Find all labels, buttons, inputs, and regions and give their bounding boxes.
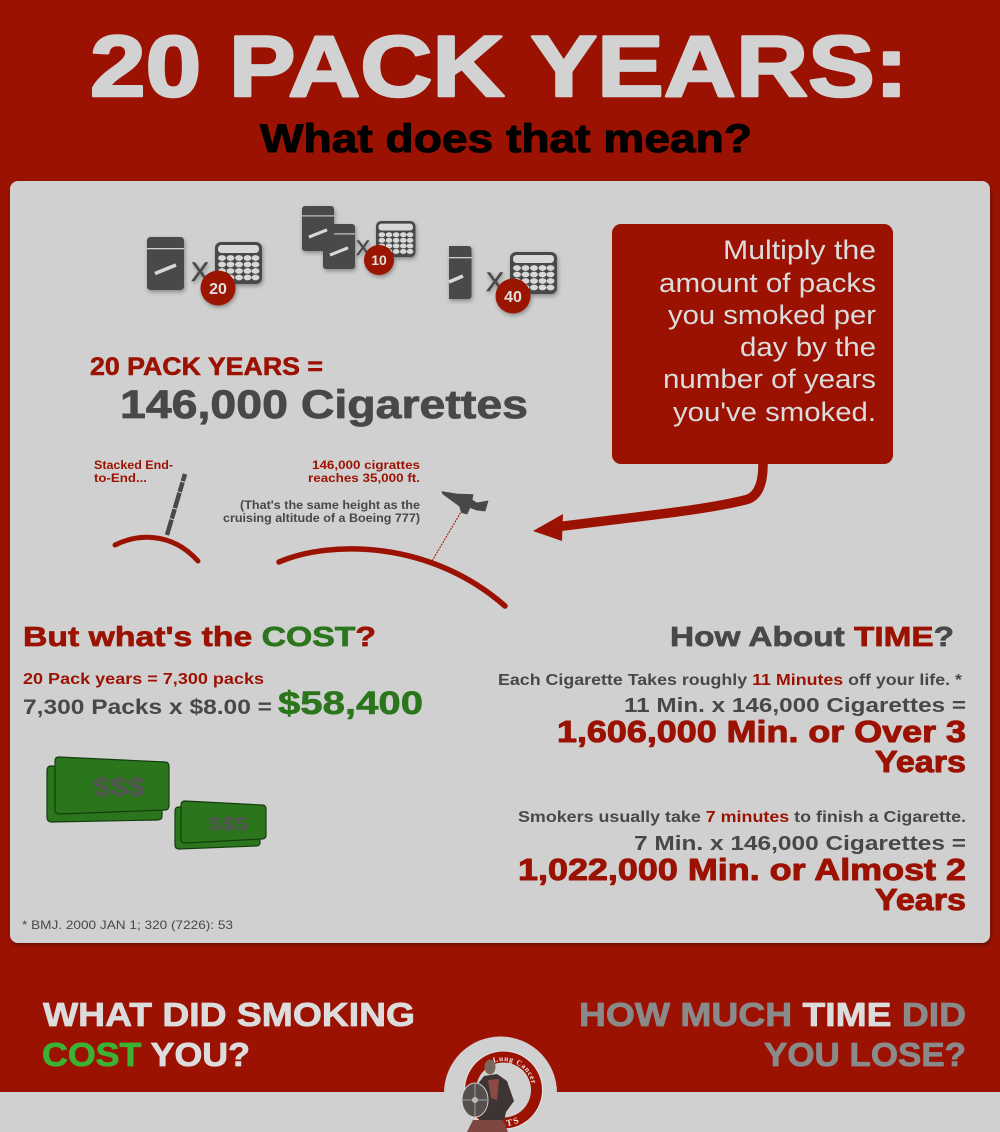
- text: each cigarette takes 11 minutes: Each Cigarette Takes roughly 11 Minutes off your life. *: [498, 672, 963, 689]
- text: Boeing 777 comparison: cruising altitude of a Boeing 777): [223, 513, 420, 525]
- text: smokers take 7 minutes: Smokers usually take 7 minutes to finish a Cigarette.: [518, 809, 966, 826]
- icon: small money: [175, 801, 266, 849]
- logo: Lung Cancer Kilts: [462, 1050, 543, 1132]
- text: cost calculation: 7,300 Packs x $8.00 =: [23, 695, 272, 719]
- icon group: 1 pack x 20 years: X: [191, 257, 209, 287]
- text: cost calculation: [23, 671, 423, 721]
- call to action: cost: WHAT DID SMOKING: [43, 996, 415, 1033]
- text: each cigarette takes 11 minutes: [498, 672, 966, 779]
- icon group: 2 packs x 10 years: [302, 206, 415, 275]
- text: cost calculation: $58,400: [278, 685, 423, 721]
- callout: how to multiply: Multiply the: [723, 235, 876, 265]
- icon: small money: $$$: [209, 814, 248, 834]
- call to action: time: [579, 996, 966, 1073]
- logo: Lung Cancer Kilts: KILTS: [504, 1117, 518, 1126]
- bottom band with arch: [0, 1036, 1000, 1132]
- text: reaches 35,000 ft: 146,000 cigrattes: [312, 460, 420, 472]
- icon group: 2 packs x 10 years: X: [356, 237, 370, 260]
- icon: large money: [47, 757, 169, 822]
- callout: how to multiply: [612, 224, 893, 464]
- text: reaches 35,000 ft: [308, 460, 420, 485]
- heading: 20 pack years equals: 20 PACK YEARS =: [90, 353, 323, 381]
- icon group: 1 pack x 20 years: [147, 237, 262, 306]
- logo: Lung Cancer Kilts: Lung Cancer: [492, 1057, 536, 1084]
- title: 20 PACK YEARS:: [90, 19, 908, 115]
- big figure: cigarettes: 146,000 Cigarettes: [120, 383, 528, 427]
- text: smokers take 7 minutes: Years: [875, 882, 966, 917]
- call to action: time: YOU LOSE?: [764, 1036, 966, 1073]
- call to action: cost: [42, 996, 415, 1073]
- callout: how to multiply: number of years: [663, 364, 876, 394]
- icon: large money: $$$: [93, 772, 145, 802]
- call to action: time: HOW MUCH TIME DID: [579, 996, 966, 1033]
- callout: how to multiply: you've smoked.: [673, 397, 876, 427]
- callout: how to multiply: you smoked per: [668, 300, 876, 330]
- text: Boeing 777 comparison: [223, 500, 420, 525]
- callout: how to multiply: day by the: [740, 332, 876, 362]
- main panel: [10, 181, 990, 943]
- text: stacked end to end: to-End...: [94, 473, 147, 485]
- text: each cigarette takes 11 minutes: 11 Min. x 146,000 Cigarettes =: [624, 694, 966, 717]
- icon group: half pack x 40 years: [449, 246, 557, 314]
- call to action: cost: COST YOU?: [42, 1036, 250, 1073]
- airplane over large earth: [279, 492, 505, 606]
- callout: how to multiply: amount of packs: [659, 268, 876, 298]
- heading: cost: But what's the COST ?: [23, 621, 376, 652]
- heading: time: How About TIME ?: [670, 621, 954, 652]
- text: smokers take 7 minutes: 7 Min. x 146,000 Cigarettes =: [634, 832, 966, 855]
- text: cost calculation: 20 Pack years = 7,300 packs: [23, 671, 264, 688]
- footnote: * BMJ. 2000 JAN 1; 320 (7226): 53: [22, 918, 233, 932]
- text: Boeing 777 comparison: (That's the same height as the: [240, 500, 420, 512]
- text: reaches 35,000 ft: reaches 35,000 ft.: [308, 473, 420, 485]
- text: each cigarette takes 11 minutes: Years: [875, 744, 966, 779]
- text: stacked end to end: Stacked End-: [94, 460, 173, 472]
- arrow from callout: [533, 464, 763, 541]
- icon group: 2 packs x 10 years: 10: [371, 252, 387, 268]
- text: smokers take 7 minutes: 1,022,000 Min. or Almost 2: [518, 852, 966, 887]
- text: smokers take 7 minutes: [518, 809, 966, 917]
- cigarette stack on small earth: [115, 474, 198, 561]
- icon group: half pack x 40 years: 40: [504, 289, 522, 306]
- text: each cigarette takes 11 minutes: 1,606,000 Min. or Over 3: [557, 714, 966, 749]
- icon group: half pack x 40 years: X: [486, 267, 504, 297]
- icon group: 1 pack x 20 years: 20: [209, 281, 227, 298]
- subtitle: What does that mean?: [260, 117, 752, 161]
- text: stacked end to end: [94, 460, 173, 485]
